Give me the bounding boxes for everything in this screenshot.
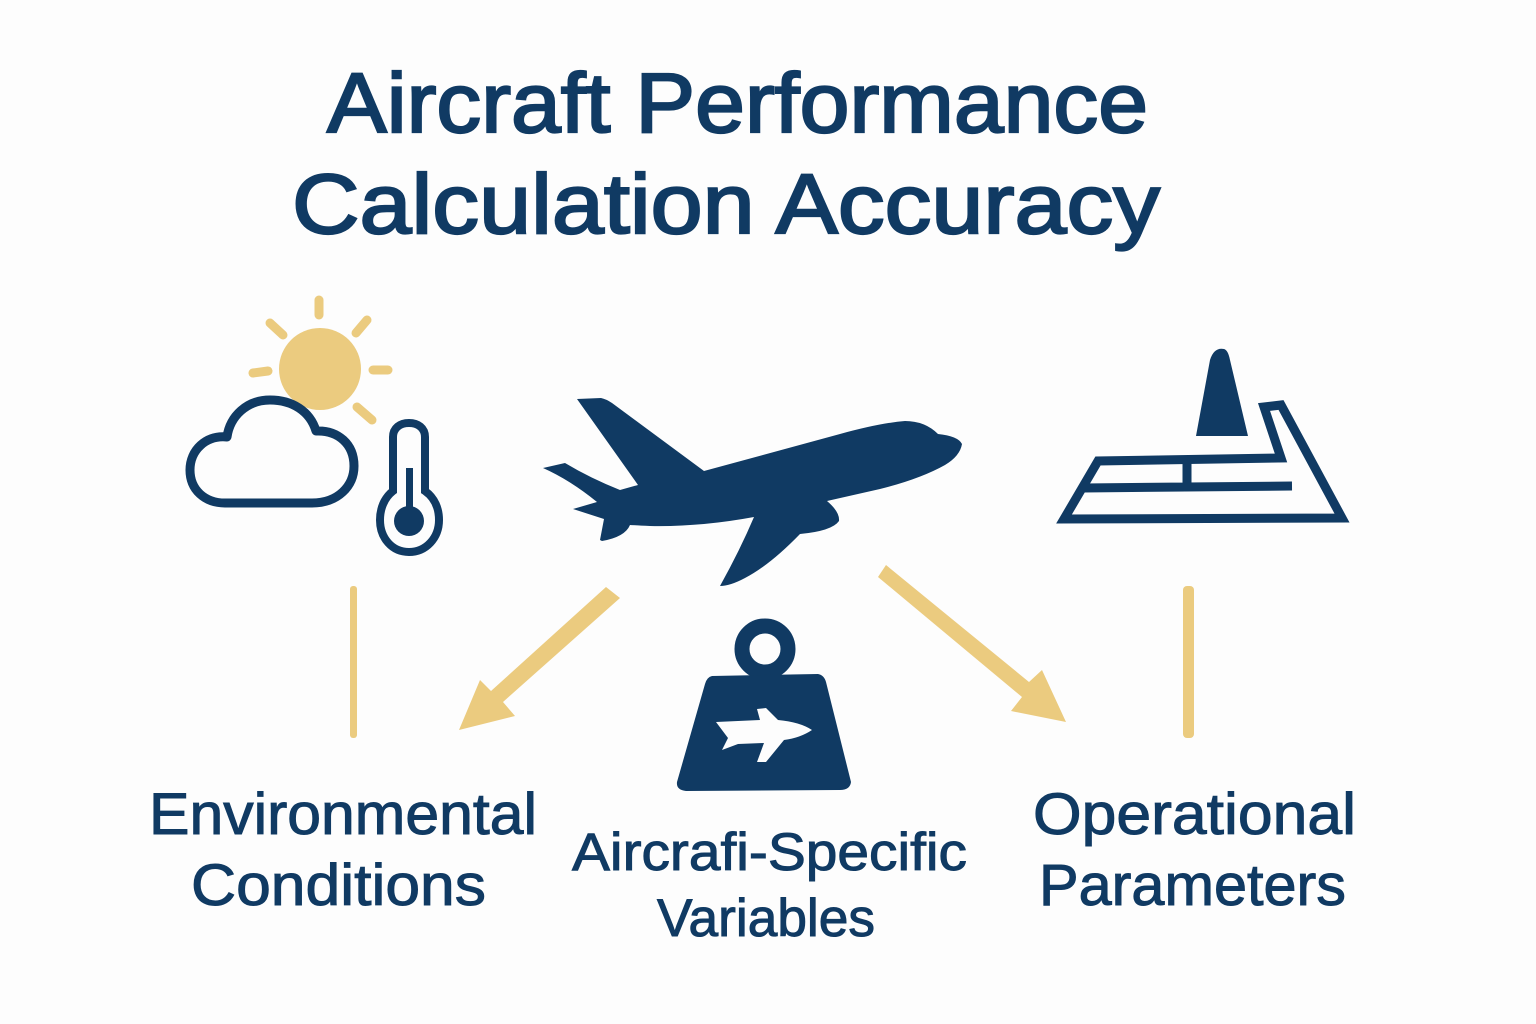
label: operational parameters: Operational: [1033, 782, 1356, 847]
connector line: right: [1183, 586, 1194, 738]
label: operational parameters: Parameters: [1039, 853, 1346, 918]
arrow: to operational parameters: [878, 565, 1066, 722]
label: environmental conditions: [149, 782, 537, 918]
label: environmental conditions: Conditions: [191, 853, 486, 918]
connector line: left: [350, 586, 357, 738]
arrow: to environmental conditions: [459, 587, 620, 730]
icon: weight with plane: [677, 626, 851, 791]
label: aircraft-specific variables: Aircrafi-Specific: [572, 823, 967, 882]
label: aircraft-specific variables: [572, 823, 967, 948]
label: operational parameters: [1033, 782, 1356, 918]
title: Aircraft Performance: [327, 56, 1148, 150]
icon: thermometer: [380, 423, 439, 552]
icon: runway and tower: [1064, 349, 1342, 519]
icon: sun: [253, 300, 388, 420]
title: Calculation Accuracy: [292, 157, 1160, 251]
label: aircraft-specific variables: Variables: [657, 889, 875, 948]
label: environmental conditions: Environmental: [149, 782, 537, 847]
title: [292, 56, 1160, 251]
icon: cloud: [190, 400, 354, 503]
icon: airplane: [543, 398, 962, 586]
